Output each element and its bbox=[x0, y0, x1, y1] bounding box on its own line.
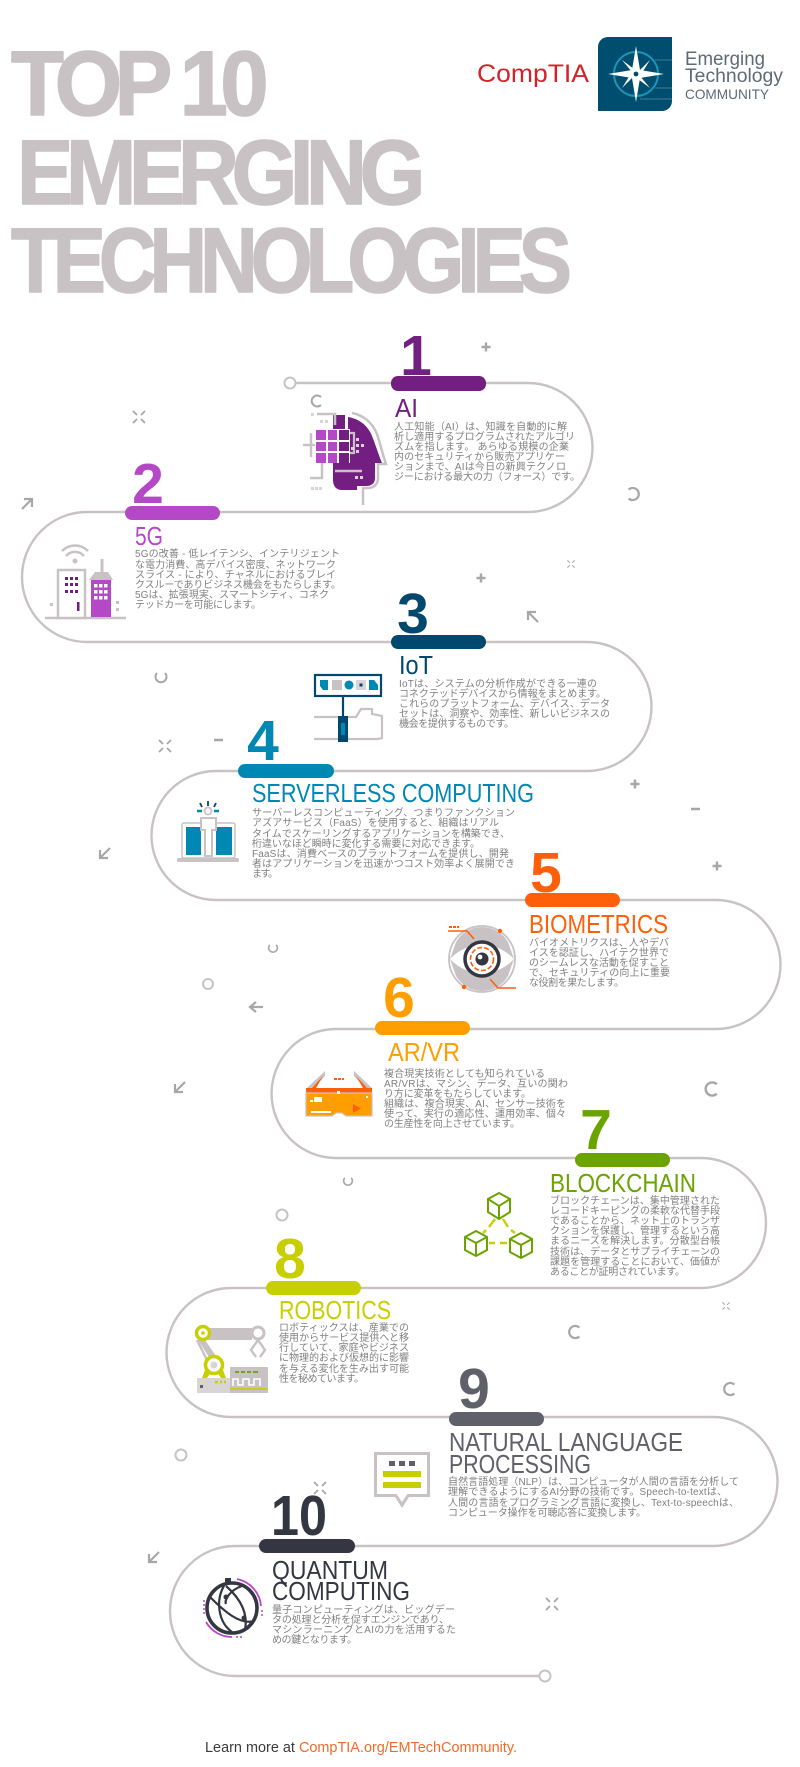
panel: 6 AR/VR bbox=[306, 966, 568, 1130]
description: 内のセキュリティから販売アプリケー bbox=[394, 450, 565, 463]
heading: 5G bbox=[135, 523, 163, 551]
description: ズムを指します。 あらゆる規模の企業 bbox=[394, 440, 569, 453]
description: ロボティックスは、産業での bbox=[279, 1321, 409, 1334]
heading: IoT bbox=[399, 652, 433, 680]
description bbox=[448, 1475, 739, 1519]
description: 自然言語処理（NLP）は、コンピュータが人間の言語を分析して bbox=[448, 1475, 739, 1488]
panel: 4 Serverless Computing bbox=[177, 709, 534, 880]
title: TOP 10 bbox=[11, 33, 266, 135]
description: であることから、ネット上のトランザ bbox=[550, 1215, 720, 1227]
description: 人工知能（AI）は、知識を自動的に解 bbox=[394, 420, 567, 433]
description: 複合現実技術としても知られている bbox=[384, 1067, 545, 1080]
panel: 9 Natural Language Processing bbox=[374, 1357, 739, 1519]
number 2: 2 bbox=[132, 452, 164, 516]
description: な電力消費、高デバイス密度、ネットワーク bbox=[135, 558, 336, 571]
description: に物理的および仮想的に影響 bbox=[279, 1351, 409, 1364]
description: 性を秘めています。 bbox=[279, 1372, 364, 1385]
description: まるニーズを解決します。分散型台帳 bbox=[550, 1234, 720, 1247]
description bbox=[384, 1067, 568, 1130]
description: AR/VRは、マシン、データ、互いの関わ bbox=[384, 1077, 568, 1090]
number 9: 9 bbox=[458, 1357, 490, 1421]
panel: 2 5G bbox=[45, 452, 341, 618]
description: テッドカーを可能にします。 bbox=[135, 598, 261, 611]
description: コンピュータ操作を可聴応答に変換します。 bbox=[448, 1506, 646, 1519]
description: IoTは、システムの分析作成ができる一連の bbox=[399, 677, 597, 690]
description bbox=[135, 547, 341, 611]
description: 析し適用するプログラムされたアルゴリ bbox=[394, 430, 575, 443]
description: 技術は、データとサプライチェーンの bbox=[550, 1245, 720, 1258]
panel: 8 Robotics bbox=[196, 1227, 409, 1393]
heading bbox=[272, 1557, 410, 1606]
description: な役割を果たします。 bbox=[529, 976, 624, 989]
description: 組織は、複合現実、AI、センサー技術を bbox=[384, 1097, 566, 1110]
panel: 3 IoT bbox=[314, 582, 610, 742]
description: イスを認証し、ハイテク世界で bbox=[529, 947, 669, 959]
description: 行していて、家庭やビジネス bbox=[279, 1341, 409, 1354]
title: TECHNOLOGIES bbox=[11, 210, 569, 312]
description: ションまで、AIは今日の新興テクノロ bbox=[394, 460, 566, 473]
heading: SERVERLESS COMPUTING bbox=[252, 780, 534, 808]
community name: Emerging bbox=[685, 49, 765, 70]
pill bbox=[391, 376, 486, 391]
number 1: 1 bbox=[400, 324, 432, 388]
panel: 5 Biometrics bbox=[448, 841, 670, 992]
description: タの処理と分析を促すエンジンであり、 bbox=[272, 1613, 449, 1626]
community name: COMMUNITY bbox=[685, 86, 770, 102]
panel: 7 Blockchain bbox=[465, 1098, 720, 1278]
logo: Emerging Technology Community bbox=[598, 37, 784, 111]
description: コネクテッドデバイスから情報をまとめます。 bbox=[399, 687, 606, 700]
description bbox=[279, 1321, 409, 1385]
icon: speech bubble bbox=[374, 1452, 430, 1508]
description: 使って、実行の適応性、運用効率、個々 bbox=[384, 1107, 566, 1120]
heading: BLOCKCHAIN bbox=[550, 1170, 696, 1198]
description: 5Gの改善 - 低レイテンシ、インテリジェント bbox=[135, 547, 340, 560]
icon: quantum globe bbox=[204, 1578, 262, 1637]
description: クションを保護し、管理するという高 bbox=[550, 1224, 720, 1237]
pill bbox=[259, 1539, 355, 1553]
icon: AI head bbox=[303, 413, 386, 505]
community name bbox=[685, 49, 784, 102]
pill bbox=[391, 635, 486, 649]
icon: eye scanner bbox=[448, 926, 516, 992]
icon: connected cubes bbox=[465, 1193, 532, 1258]
description bbox=[529, 936, 670, 989]
description: で、セキュリティの向上に重要 bbox=[529, 966, 670, 979]
number 3: 3 bbox=[397, 582, 429, 646]
heading: NATURAL LANGUAGE bbox=[449, 1429, 683, 1457]
description: を与える変化を生み出す可能 bbox=[279, 1362, 409, 1375]
description: タイムでスケーリングするアプリケーションを構築でき、 bbox=[252, 827, 510, 840]
heading: PROCESSING bbox=[449, 1451, 591, 1479]
description: ジーにおける最大の力（フォース）です。 bbox=[394, 470, 580, 483]
description: 課題を管理することにおいて、価値が bbox=[550, 1255, 720, 1268]
number 7: 7 bbox=[580, 1098, 612, 1162]
description: バイオメトリクスは、人やデバ bbox=[529, 936, 669, 949]
description: の生産性を向上させています。 bbox=[384, 1117, 520, 1130]
description: あることが証明されています。 bbox=[550, 1265, 685, 1278]
title: EMERGING bbox=[17, 122, 420, 224]
heading: ROBOTICS bbox=[279, 1297, 391, 1325]
pill bbox=[266, 1281, 361, 1295]
description: 使用からサービス提供へと移 bbox=[279, 1331, 409, 1344]
panel: 1 AI bbox=[303, 324, 580, 505]
icon: compass badge bbox=[598, 37, 672, 111]
icon: wifi and buildings bbox=[45, 545, 126, 618]
description: これらのプラットフォーム、デバイス、データ bbox=[399, 697, 610, 710]
number 5: 5 bbox=[530, 841, 562, 905]
title bbox=[11, 33, 569, 312]
heading: QUANTUM bbox=[272, 1557, 388, 1585]
heading: AR/VR bbox=[388, 1039, 460, 1067]
pill bbox=[525, 893, 620, 907]
icon: robot arm bbox=[196, 1326, 268, 1393]
heading bbox=[449, 1429, 683, 1479]
description: 人間の言語をプログラミング言語に変換し、Text-to-speechは、 bbox=[448, 1496, 739, 1509]
description: 者はアプリケーションを迅速かつコスト効率よく展開でき bbox=[252, 858, 515, 870]
description: クスルーでありビジネス機会をもたらします。 bbox=[135, 578, 341, 591]
description: スライス - により、チャネルにおけるブレイ bbox=[135, 568, 336, 581]
logo: CompTIA wordmark: CompTIA bbox=[477, 60, 589, 88]
description: レコードキーピングの柔軟な代替手段 bbox=[550, 1204, 720, 1217]
description: 桁違いなほど瞬時に変化する需要に対応できます。 bbox=[252, 837, 480, 850]
number 6: 6 bbox=[383, 966, 415, 1030]
pill bbox=[449, 1412, 544, 1426]
timeline path bbox=[22, 378, 780, 1682]
description: マシンラーニングとAIの力を活用するた bbox=[272, 1623, 456, 1636]
icon: person on laptop bbox=[177, 801, 239, 862]
heading: AI bbox=[395, 395, 418, 423]
description: FaaSは、消費ベースのプラットフォームを提供し、開発 bbox=[252, 847, 509, 860]
description bbox=[394, 420, 580, 483]
community name: Technology bbox=[685, 66, 784, 87]
description: のシームレスな活動を促すこと bbox=[529, 956, 669, 969]
number 8: 8 bbox=[274, 1227, 306, 1291]
pill bbox=[125, 506, 220, 520]
description: 理解できるようにするAI分野の技術です。Speech-to-textは、 bbox=[448, 1485, 727, 1498]
description bbox=[252, 806, 515, 880]
icon: IoT wristband bbox=[314, 675, 382, 742]
pill bbox=[575, 1153, 670, 1167]
description: セットは、洞察や、効率性、新しいビジネスの bbox=[399, 707, 610, 720]
description bbox=[399, 677, 610, 730]
pill bbox=[375, 1021, 470, 1035]
description: サーバーレスコンピューティング、つまりファンクション bbox=[252, 806, 515, 819]
footer link: Learn more at CompTIA.org/EMTechCommunity. bbox=[205, 1740, 517, 1756]
description: 5Gは、拡張現実、スマートシティ、コネク bbox=[135, 588, 329, 601]
description: ブロックチェーンは、集中管理された bbox=[550, 1194, 720, 1207]
icon: AR glasses bbox=[306, 1071, 372, 1116]
description: り方に変革をもたらしています。 bbox=[384, 1087, 531, 1100]
description: 量子コンピューティングは、ビッグデー bbox=[272, 1603, 455, 1616]
heading: COMPUTING bbox=[272, 1578, 410, 1606]
number 10: 10 bbox=[271, 1484, 327, 1548]
number 4: 4 bbox=[247, 709, 279, 773]
pill bbox=[238, 764, 334, 778]
description bbox=[272, 1603, 456, 1646]
description: アズアサービス（FaaS）を使用すると、組織はリアル bbox=[252, 816, 499, 829]
description: めの鍵となります。 bbox=[272, 1633, 357, 1646]
heading: BIOMETRICS bbox=[529, 911, 668, 939]
description: ます。 bbox=[252, 868, 278, 880]
panel: 10 Quantum Computing bbox=[204, 1484, 456, 1646]
description: 機会を提供するものです。 bbox=[399, 717, 514, 730]
description bbox=[550, 1194, 720, 1278]
